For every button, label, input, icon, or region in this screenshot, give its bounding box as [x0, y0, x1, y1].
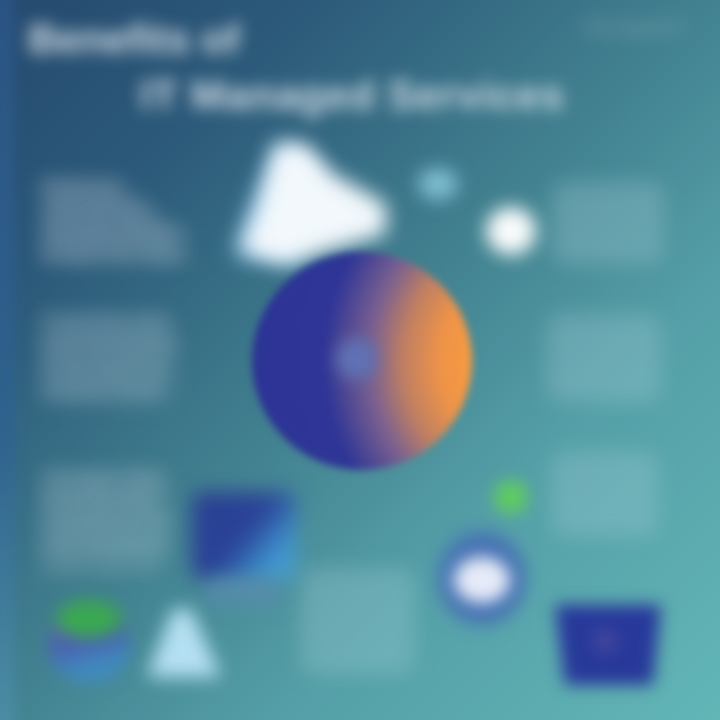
text lines: lower left: compliance for [40, 512, 175, 533]
text lines: middle left: of all systems [40, 357, 166, 378]
left edge strip [0, 0, 14, 720]
panel: top right [552, 182, 664, 264]
text lines: lower left: Stronger data [40, 466, 164, 487]
text block: lower left [34, 462, 176, 578]
icon: light triangle [140, 598, 228, 689]
text lines: middle left [40, 311, 178, 401]
icon: square reflection [205, 582, 280, 602]
text lines: lower left: your business [40, 535, 169, 556]
badge ring [438, 531, 526, 625]
text lines: lower left: security and [40, 489, 152, 510]
text lines: top left: Reduced [40, 176, 120, 197]
icon: speech badge [430, 524, 534, 634]
icon: triangle glow [224, 134, 324, 274]
panel: middle right [547, 314, 661, 402]
text lines: top left [40, 176, 190, 266]
block shade: top left [36, 172, 186, 269]
icon: navy box [546, 594, 671, 697]
chart: central gradient circle [252, 252, 472, 470]
block shade: lower left [43, 472, 168, 564]
panel: bottom centre [300, 568, 414, 674]
text block: top left [32, 170, 192, 272]
icon: white triangle [231, 128, 402, 278]
title line 1: Benefits of [28, 16, 240, 62]
icon: white dot [486, 207, 536, 255]
icon: blue square [192, 492, 296, 580]
block shade: middle left [43, 315, 173, 403]
text lines: top left: cost and pre [40, 199, 153, 220]
text lines: lower left [40, 466, 175, 576]
title line 2: IT Managed Services [140, 72, 565, 118]
text lines: top left: dictable monthly [40, 222, 190, 243]
text block: middle left [34, 306, 183, 410]
text lines: middle left: and monitoring [40, 334, 178, 355]
header tag: Managed IT [585, 17, 684, 37]
text lines: middle left: around clock [40, 380, 158, 401]
globe base [48, 612, 130, 682]
icon: circle centre [336, 338, 378, 380]
panel: lower right [552, 452, 658, 536]
globe top [56, 600, 122, 638]
text lines: middle left: Proactive care [40, 311, 170, 332]
icon: small teal dot [418, 168, 458, 200]
badge centre [454, 557, 510, 603]
icon: layered globe [44, 592, 134, 688]
icon: green dot [494, 480, 528, 514]
